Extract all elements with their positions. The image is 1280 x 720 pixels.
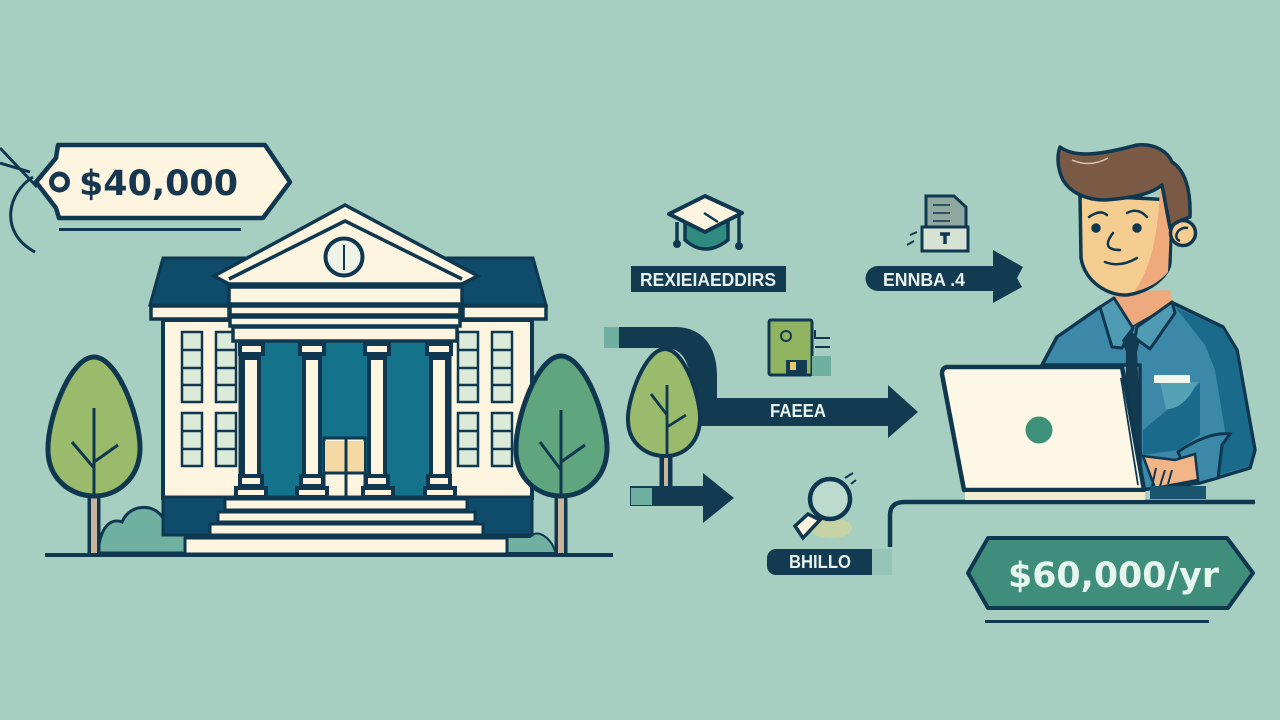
hair — [1058, 145, 1190, 228]
steps — [185, 499, 507, 554]
price tag: $40,000 — [0, 145, 290, 252]
facial features — [1089, 211, 1147, 264]
laptop — [942, 367, 1145, 500]
curved main arrow with label: FAEEA — [770, 401, 826, 421]
ground line — [45, 553, 613, 557]
tree right — [516, 356, 607, 553]
keyboard — [1150, 486, 1206, 499]
salary tag: $60,000/yr — [968, 538, 1253, 623]
bush right — [505, 533, 556, 553]
shirt — [1042, 303, 1255, 490]
entablature — [229, 287, 462, 341]
neck — [1113, 290, 1172, 327]
right roof — [430, 258, 546, 305]
sleeve cuff — [1178, 434, 1230, 483]
lower arrow — [630, 473, 734, 523]
salary tag: $60,000/yr: $60,000/yr — [1008, 556, 1219, 596]
university building — [150, 205, 546, 554]
hand — [1143, 454, 1198, 488]
wall — [163, 320, 532, 498]
icon: graduation cap — [669, 196, 743, 250]
shirt shading — [1143, 307, 1253, 475]
label: bottom: BHILLO — [789, 552, 851, 572]
pediment — [214, 205, 478, 284]
price tag: $40,000: $40,000 — [79, 164, 238, 204]
star-tipped arrow with label: ENNBA .4 — [883, 270, 965, 290]
icon: green folder — [769, 320, 831, 376]
door — [324, 438, 365, 497]
star-tipped arrow with label — [866, 250, 1023, 303]
bush left — [98, 507, 190, 553]
ear — [1170, 220, 1196, 246]
face — [1080, 195, 1172, 295]
tree left — [48, 357, 140, 553]
face shading — [1135, 186, 1170, 291]
columns — [236, 344, 455, 497]
desk line connector — [890, 502, 1255, 547]
person — [1042, 145, 1255, 499]
ledges — [151, 306, 546, 319]
base — [163, 497, 532, 535]
portico backing — [240, 340, 450, 497]
windows — [182, 332, 512, 466]
curved main arrow with label — [604, 327, 918, 438]
pocket — [1160, 382, 1198, 409]
collar — [1100, 298, 1175, 349]
label: top left — [631, 266, 786, 292]
left roof — [150, 258, 260, 305]
label: bottom — [767, 549, 892, 575]
icon: document box — [907, 196, 968, 251]
mid tree trunk — [660, 450, 672, 487]
label: top left: REXIEIAEDDIRS — [640, 270, 776, 290]
tie — [1122, 330, 1142, 455]
mid tree crown — [628, 349, 700, 456]
icon: magnifying glass — [795, 473, 856, 538]
